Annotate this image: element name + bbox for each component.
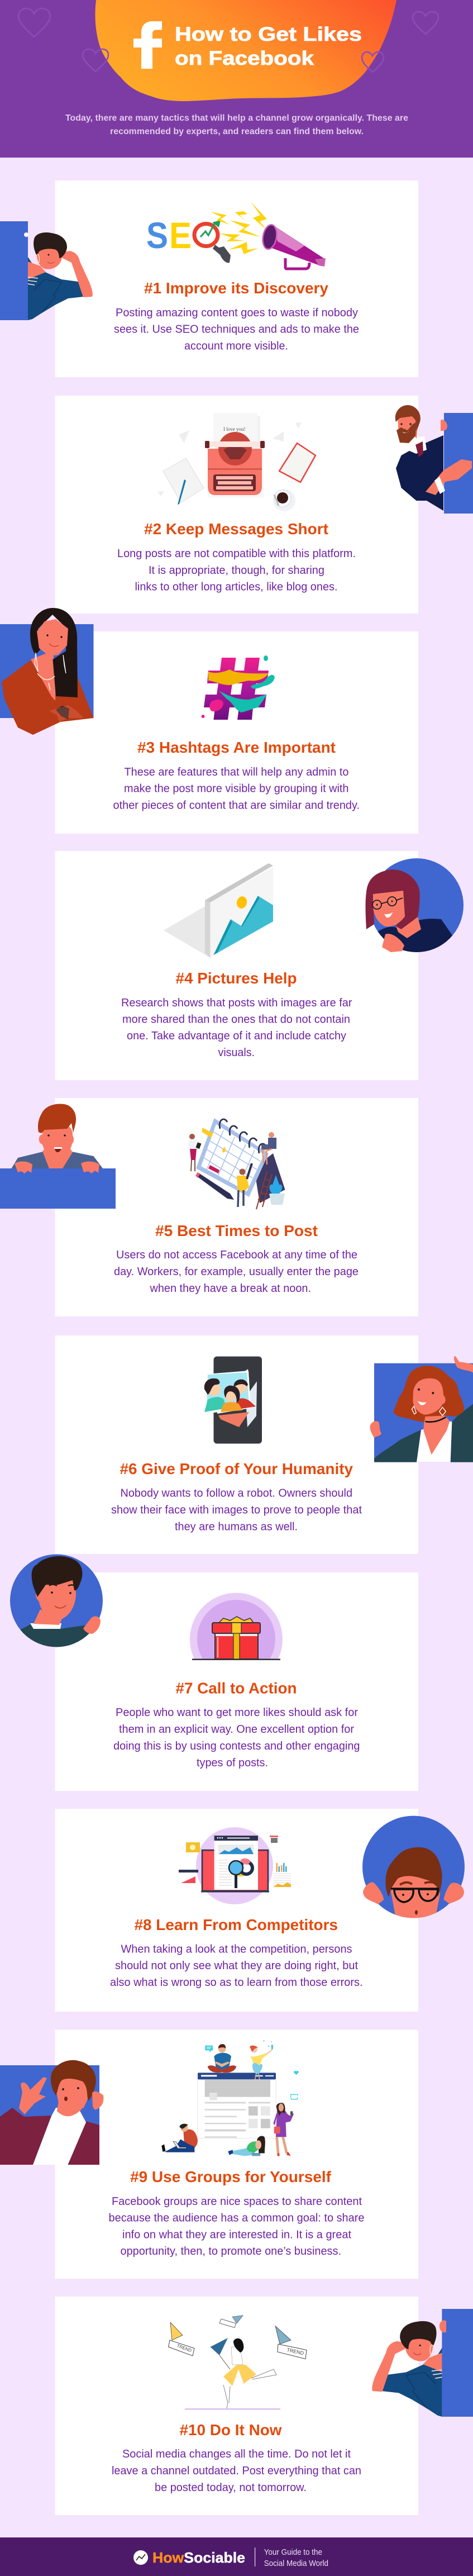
logo mark [133, 2550, 148, 2565]
body text: Facebook groups are nice spaces to share content [112, 2195, 362, 2208]
body text: leave a channel outdated. Post everything that can [112, 2465, 361, 2477]
body text [111, 1487, 362, 1533]
body text [113, 766, 360, 811]
title: on Facebook [175, 47, 314, 69]
icon: group of people around a facebook page [161, 2041, 299, 2156]
panel: tip 6 [55, 1335, 418, 1554]
body text [108, 2195, 364, 2257]
body text [121, 997, 352, 1059]
body text: It is appropriate, though, for sharing [149, 564, 324, 577]
icon: facebook f [133, 21, 162, 69]
icon: colourful hashtag [201, 655, 275, 720]
body text: opportunity, then, to promote one’s business. [121, 2245, 341, 2257]
body text: other pieces of content that are similar and trendy. [113, 799, 360, 811]
icon: isometric picture frame [164, 863, 273, 958]
tagline [264, 2548, 328, 2568]
panel: tip 5 [55, 1098, 418, 1316]
intro text: recommended by experts, and readers can find them below. [110, 127, 364, 136]
body text: because the audience has a common goal: to share [108, 2212, 364, 2224]
title: How to Get Likes [175, 23, 362, 45]
body text: also what is wrong so as to learn from those errors. [110, 1976, 363, 1989]
body text [114, 1249, 359, 1295]
panel: tip 8 [55, 1809, 418, 2012]
body text: when they have a break at noon. [150, 1282, 311, 1295]
body text: Users do not access Facebook at any time of the [116, 1249, 357, 1261]
icon: calendar with people [188, 1118, 285, 1209]
body text [114, 307, 359, 352]
body text: show their face with images to prove to people that [111, 1504, 362, 1517]
icon: typewriter and desk items: I love you! [223, 426, 246, 432]
heading: #1 Improve its Discovery [144, 279, 328, 297]
person peeking: woman with hand on forehead, mirrored [372, 2309, 473, 2417]
heading: #6 Give Proof of Your Humanity [120, 1460, 353, 1477]
body text: more shared than the ones that do not contain [122, 1014, 350, 1026]
icon: gift on lilac circle [190, 1593, 283, 1660]
panel: tip 1 [55, 180, 418, 377]
heading: #4 Pictures Help [175, 969, 297, 987]
person peeking: man with glasses in blue circle [362, 1816, 465, 1922]
tagline: Your Guide to the [264, 2548, 322, 2557]
heading: #8 Learn From Competitors [134, 1916, 338, 1933]
body text: info on what they are interested in. It is a great [122, 2228, 351, 2241]
body text [117, 548, 356, 593]
icon: girl running with trend flags: TREND [286, 2347, 304, 2356]
body text: visuals. [218, 1047, 255, 1059]
body text: People who want to get more likes should ask for [116, 1707, 358, 1719]
icon: phone with family photo [204, 1357, 262, 1444]
intro text [65, 113, 408, 136]
brand name: HowSociable [152, 2549, 245, 2566]
body text: make the post more visible by grouping it with [124, 782, 348, 795]
body text: should not only see what they are doing right, but [115, 1960, 358, 1972]
body text: they are humans as well. [175, 1521, 298, 1533]
body text: day. Workers, for example, usually enter the page [114, 1266, 359, 1278]
body text [113, 1707, 360, 1769]
heading: #7 Call to Action [175, 1680, 297, 1696]
person peeking: man over blue wall [0, 1104, 116, 1209]
icon: analytics on laptop with magnifier [179, 1827, 291, 1904]
tagline: Social Media World [264, 2559, 328, 2568]
icon: typewriter and desk items [157, 413, 316, 511]
body text: account more visible. [184, 340, 288, 352]
icon: girl running with trend flags [169, 2316, 307, 2409]
body text [110, 1943, 363, 1989]
panel: tip 7 [55, 1572, 418, 1791]
person peeking: woman with curly red hair [370, 1356, 473, 1462]
decorative hearts [18, 8, 438, 72]
icon: SEO magnifier and megaphone [146, 202, 326, 269]
heading: #3 Hashtags Are Important [137, 739, 336, 756]
body text: doing this is by using contests and other engaging [113, 1740, 360, 1752]
body text: sees it. Use SEO techniques and ads to make the [114, 323, 359, 335]
person peeking: woman with hand on forehead [0, 221, 93, 320]
body text: be posted today, not tomorrow. [155, 2482, 307, 2494]
body text: links to other long articles, like blog ones. [135, 581, 337, 593]
body text: When taking a look at the competition, persons [121, 1943, 352, 1956]
body text: Posting amazing content goes to waste if nobody [116, 307, 358, 319]
icon: SEO magnifier and megaphone: E [169, 215, 192, 256]
person peeking: woman with glasses in circle [365, 858, 466, 956]
person peeking: man in blue circle [10, 1555, 103, 1654]
heading: #9 Use Groups for Yourself [130, 2168, 332, 2185]
panel: tip 4 [55, 851, 418, 1080]
intro text: Today, there are many tactics that will help a channel grow organically. These are [65, 113, 408, 123]
header banner [0, 0, 473, 158]
heading: #10 Do It Now [180, 2421, 282, 2439]
panel: tip 10 [55, 2297, 418, 2515]
body text: Social media changes all the time. Do not let it [122, 2448, 351, 2460]
body text: Nobody wants to follow a robot. Owners should [121, 1487, 352, 1500]
icon: girl running with trend flags: TREND [176, 2343, 192, 2353]
body text: Research shows that posts with images are far [121, 997, 352, 1009]
body text [112, 2448, 361, 2494]
orange blob behind title [95, 0, 396, 101]
body text: one. Take advantage of it and include catchy [127, 1030, 346, 1042]
person peeking: woman with long hair [0, 608, 94, 735]
person peeking: man pointing [0, 2060, 103, 2165]
title [175, 23, 362, 69]
body text: Long posts are not compatible with this platform. [117, 548, 356, 560]
body text: These are features that will help any admin to [124, 766, 348, 778]
body text: types of posts. [197, 1757, 268, 1769]
person peeking: bearded man [395, 405, 473, 514]
body text: them in an explicit way. One excellent option for [119, 1723, 354, 1736]
panel: tip 3 [55, 631, 418, 834]
footer bar [0, 2537, 473, 2576]
panel: tip 9 [55, 2030, 418, 2279]
heading: #2 Keep Messages Short [144, 520, 328, 538]
icon: SEO magnifier and megaphone: S [146, 215, 168, 256]
heading: #5 Best Times to Post [155, 1222, 318, 1239]
panel: tip 2 [55, 396, 418, 614]
